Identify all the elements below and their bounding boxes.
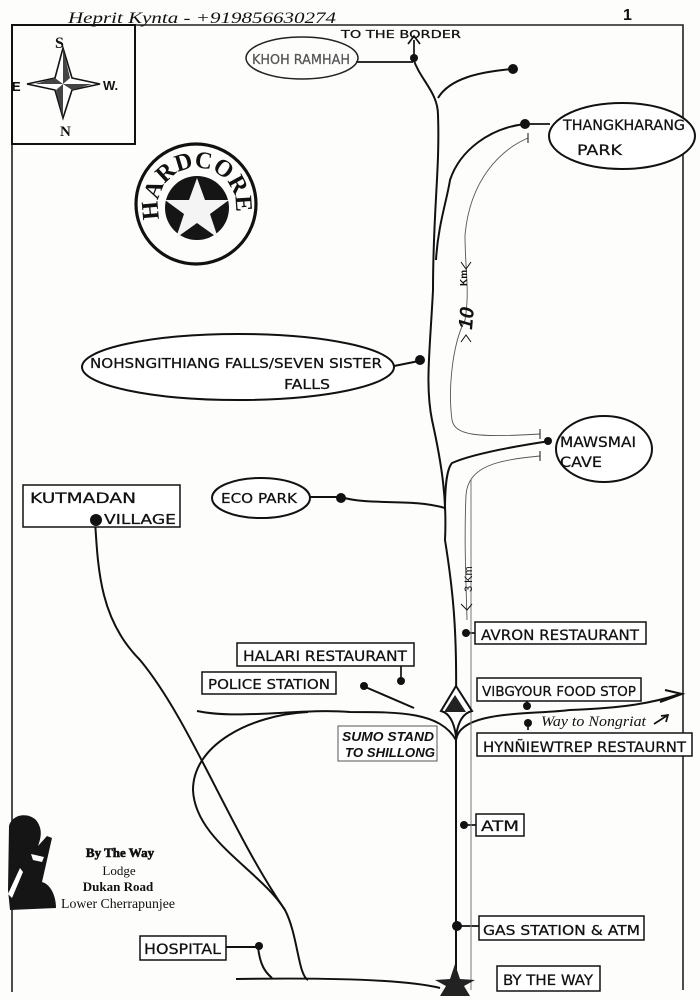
distance arrows: Km <box>459 270 470 286</box>
label: way to Nongriat: Way to Nongriat <box>541 714 647 730</box>
icon: star destination <box>435 964 475 996</box>
label: Kutmadan Village: KUTMADAN <box>30 491 136 507</box>
label: Avron Restaurant: AVRON RESTAURANT <box>481 628 639 644</box>
label: ATM <box>476 814 524 836</box>
label: Hospital <box>140 936 226 960</box>
label: By The Way <box>497 966 600 991</box>
label: ATM: ATM <box>481 819 519 835</box>
label: Thangkharang Park: PARK <box>577 143 623 159</box>
dots: map markers <box>90 54 552 950</box>
label: Hynniewtrep Restaurant <box>477 733 692 756</box>
icon: compass star <box>27 48 100 118</box>
label: to the border: TO THE BORDER <box>340 29 461 41</box>
label: Sumo stand to Shillong <box>338 726 437 761</box>
icon: hiker silhouette <box>8 815 56 910</box>
label: Mawsmai Cave <box>556 416 652 482</box>
label: Thangkharang Park <box>549 103 695 169</box>
page number: 1 <box>623 7 632 24</box>
icon: junction triangle <box>441 686 472 736</box>
distance arrows: 10 <box>455 306 479 330</box>
label: Mawsmai Cave: MAWSMAI <box>560 435 636 451</box>
label: Gas Station and ATM <box>479 916 644 940</box>
label: Sumo stand to Shillong: SUMO STAND <box>342 730 434 744</box>
text: lodge address: Dukan Road <box>83 879 154 894</box>
logo: hardcore stamp <box>134 142 258 266</box>
distance arrows: 3 Km <box>463 566 475 592</box>
logo: hardcore stamp: HARDCORE <box>142 152 252 220</box>
label: Eco Park <box>212 478 310 518</box>
text: lodge address: Lower Cherrapunjee <box>61 897 175 912</box>
label: Eco Park: ECO PARK <box>221 491 298 507</box>
compass panel: S <box>55 35 64 52</box>
label: Avron Restaurant <box>475 622 646 644</box>
main road network <box>95 36 682 990</box>
label: Sumo stand to Shillong: TO SHILLONG <box>345 746 435 760</box>
text: lodge address: Lodge <box>102 863 136 878</box>
label: Halari Restaurant <box>237 643 414 666</box>
label: Khoh Ramhah <box>246 37 358 79</box>
text: lodge address: By The Way <box>86 845 155 860</box>
text: lodge address <box>61 845 175 912</box>
label: Nohsngithiang Falls <box>82 334 394 400</box>
label: Halari Restaurant: HALARI RESTAURANT <box>243 649 407 665</box>
compass panel: N <box>60 124 71 140</box>
title: contact name and phone: Heprit Kynta - +919856630274 <box>67 10 336 27</box>
label: Kutmadan Village <box>23 485 180 528</box>
label: Nohsngithiang Falls: FALLS <box>284 377 330 393</box>
compass panel: W. <box>103 78 118 93</box>
label: Hospital: HOSPITAL <box>144 942 221 958</box>
label: Gas Station and ATM: GAS STATION & ATM <box>483 923 640 939</box>
label: Vibgyour Food Stop: VIBGYOUR FOOD STOP <box>482 684 636 700</box>
label: Nohsngithiang Falls: NOHSNGITHIANG FALLS/SEVEN SISTER <box>90 356 382 372</box>
label: Police Station: POLICE STATION <box>208 677 330 693</box>
distance arrows <box>451 133 540 620</box>
label: Vibgyour Food Stop <box>477 678 641 701</box>
label: Hynniewtrep Restaurant: HYNÑIEWTREP RESTAURNT <box>483 739 686 756</box>
label: Kutmadan Village: VILLAGE <box>104 512 176 528</box>
label: Mawsmai Cave: CAVE <box>560 455 602 471</box>
compass panel <box>12 25 135 144</box>
label: Police Station <box>202 672 336 694</box>
compass panel: E <box>12 79 21 94</box>
label: Khoh Ramhah: KHOH RAMHAH <box>252 53 350 68</box>
label: Thangkharang Park: THANGKHARANG <box>562 118 685 134</box>
label: By The Way: BY THE WAY <box>503 973 593 989</box>
